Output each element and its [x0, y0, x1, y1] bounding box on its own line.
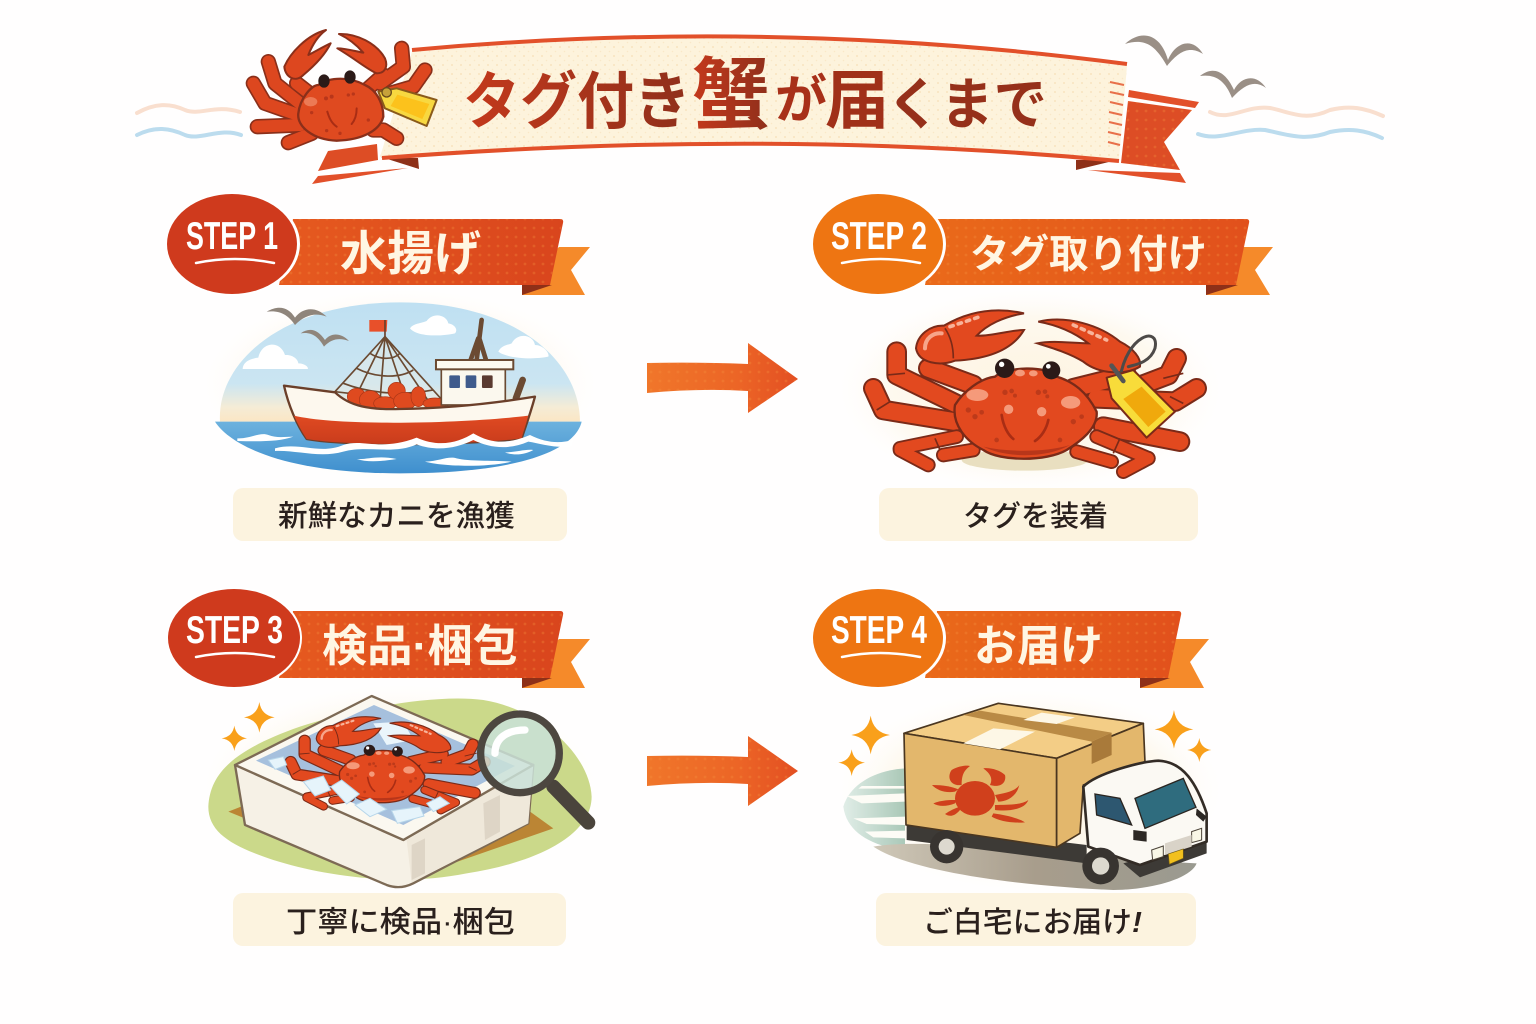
title: タグ付き: [463, 68, 691, 137]
caption box: 丁寧に検品·梱包: [286, 906, 515, 939]
box rim: [235, 696, 533, 840]
clouds: [243, 315, 549, 369]
caption box: [876, 893, 1196, 946]
bumper: [1123, 840, 1207, 877]
sparkles: [838, 710, 1211, 776]
illustration: delivery truck: [838, 703, 1211, 890]
title: くまで: [887, 73, 1047, 136]
hull: [284, 386, 535, 444]
arrow: step 1 to step 2: [647, 343, 798, 413]
magnifier: [481, 714, 588, 823]
panel: step 2: [812, 192, 1273, 541]
caption box: ご白宅にお届け!: [923, 906, 1142, 939]
road shadow: [873, 844, 1197, 890]
cab: [1083, 761, 1207, 865]
ribbon: 検品・梱包: [279, 611, 590, 688]
ribbon: 水揚げ: 水揚げ: [340, 227, 481, 280]
panel: step 4: [812, 587, 1230, 946]
badge: STEP 4: STEP 4: [831, 609, 927, 652]
badge: STEP 3: [168, 587, 302, 689]
mat: [228, 790, 553, 882]
caption box: タグを装着: [963, 500, 1108, 533]
illustration: fishing boat: [215, 302, 582, 473]
illustration glow: [830, 285, 1230, 495]
wheels: [930, 830, 1119, 884]
caption box: [879, 488, 1198, 541]
title: 届: [825, 65, 889, 137]
chassis: [907, 823, 1087, 863]
badge: STEP 4: [812, 587, 946, 689]
badge: STEP 1: [166, 192, 300, 296]
ribbon: お届け: [925, 611, 1209, 688]
title: が: [775, 72, 827, 130]
panel: step 3: [168, 587, 605, 946]
birds: [267, 308, 349, 347]
caption box: [233, 488, 567, 541]
crab catch: [347, 382, 447, 410]
badge: STEP 3: STEP 3: [186, 609, 283, 652]
ribbon body: [380, 36, 1127, 161]
ice: [268, 757, 449, 823]
title: 蟹: [692, 51, 770, 139]
illustration glow: [830, 685, 1230, 895]
header banner: [137, 30, 1383, 184]
badge: STEP 2: [812, 192, 946, 296]
illustration: foam box with crab and magnifier: [208, 696, 592, 887]
sparkles: [222, 702, 275, 751]
icon: header crab with tag: [253, 30, 437, 143]
waves right: [1198, 108, 1383, 138]
highlights: [963, 728, 1035, 749]
ribbon: お届け: お届け: [974, 623, 1103, 671]
waves: [237, 433, 573, 466]
arrow: step 3 to step 4: [647, 736, 798, 806]
tag: [1107, 336, 1175, 438]
title: [463, 51, 1047, 139]
ribbon: タグ取り付け: タグ取り付け: [970, 233, 1207, 277]
cargo box: [904, 703, 1143, 758]
crab logo: [932, 766, 1028, 823]
flag and mast: [369, 320, 387, 332]
crab in box: [291, 717, 485, 810]
ribbon: タグ取り付け: [925, 219, 1273, 295]
badge: STEP 1: STEP 1: [186, 215, 278, 258]
illustration glow: [195, 680, 605, 890]
box body: [235, 765, 533, 887]
birds: [1125, 36, 1266, 98]
illustration glow: [195, 285, 605, 485]
net: [335, 337, 447, 405]
panel: step 1: [166, 192, 605, 541]
ribbon tail left: [312, 144, 419, 184]
cabin: [471, 320, 486, 360]
ribbon tail right: [1076, 90, 1199, 183]
tape: [963, 711, 1112, 742]
caption box: [233, 893, 566, 946]
badge: STEP 2: STEP 2: [831, 215, 927, 258]
green background: [208, 698, 592, 879]
speed lines: [843, 768, 905, 850]
interior: [256, 705, 515, 825]
caption box: 新鮮なカニを漁獲: [278, 500, 515, 533]
illustration: crab with tag: [873, 310, 1197, 472]
waves left: [137, 105, 241, 137]
ribbon: 検品・梱包: 検品·梱包: [322, 622, 518, 671]
ribbon: 水揚げ: [279, 219, 590, 295]
sea: [215, 422, 582, 473]
